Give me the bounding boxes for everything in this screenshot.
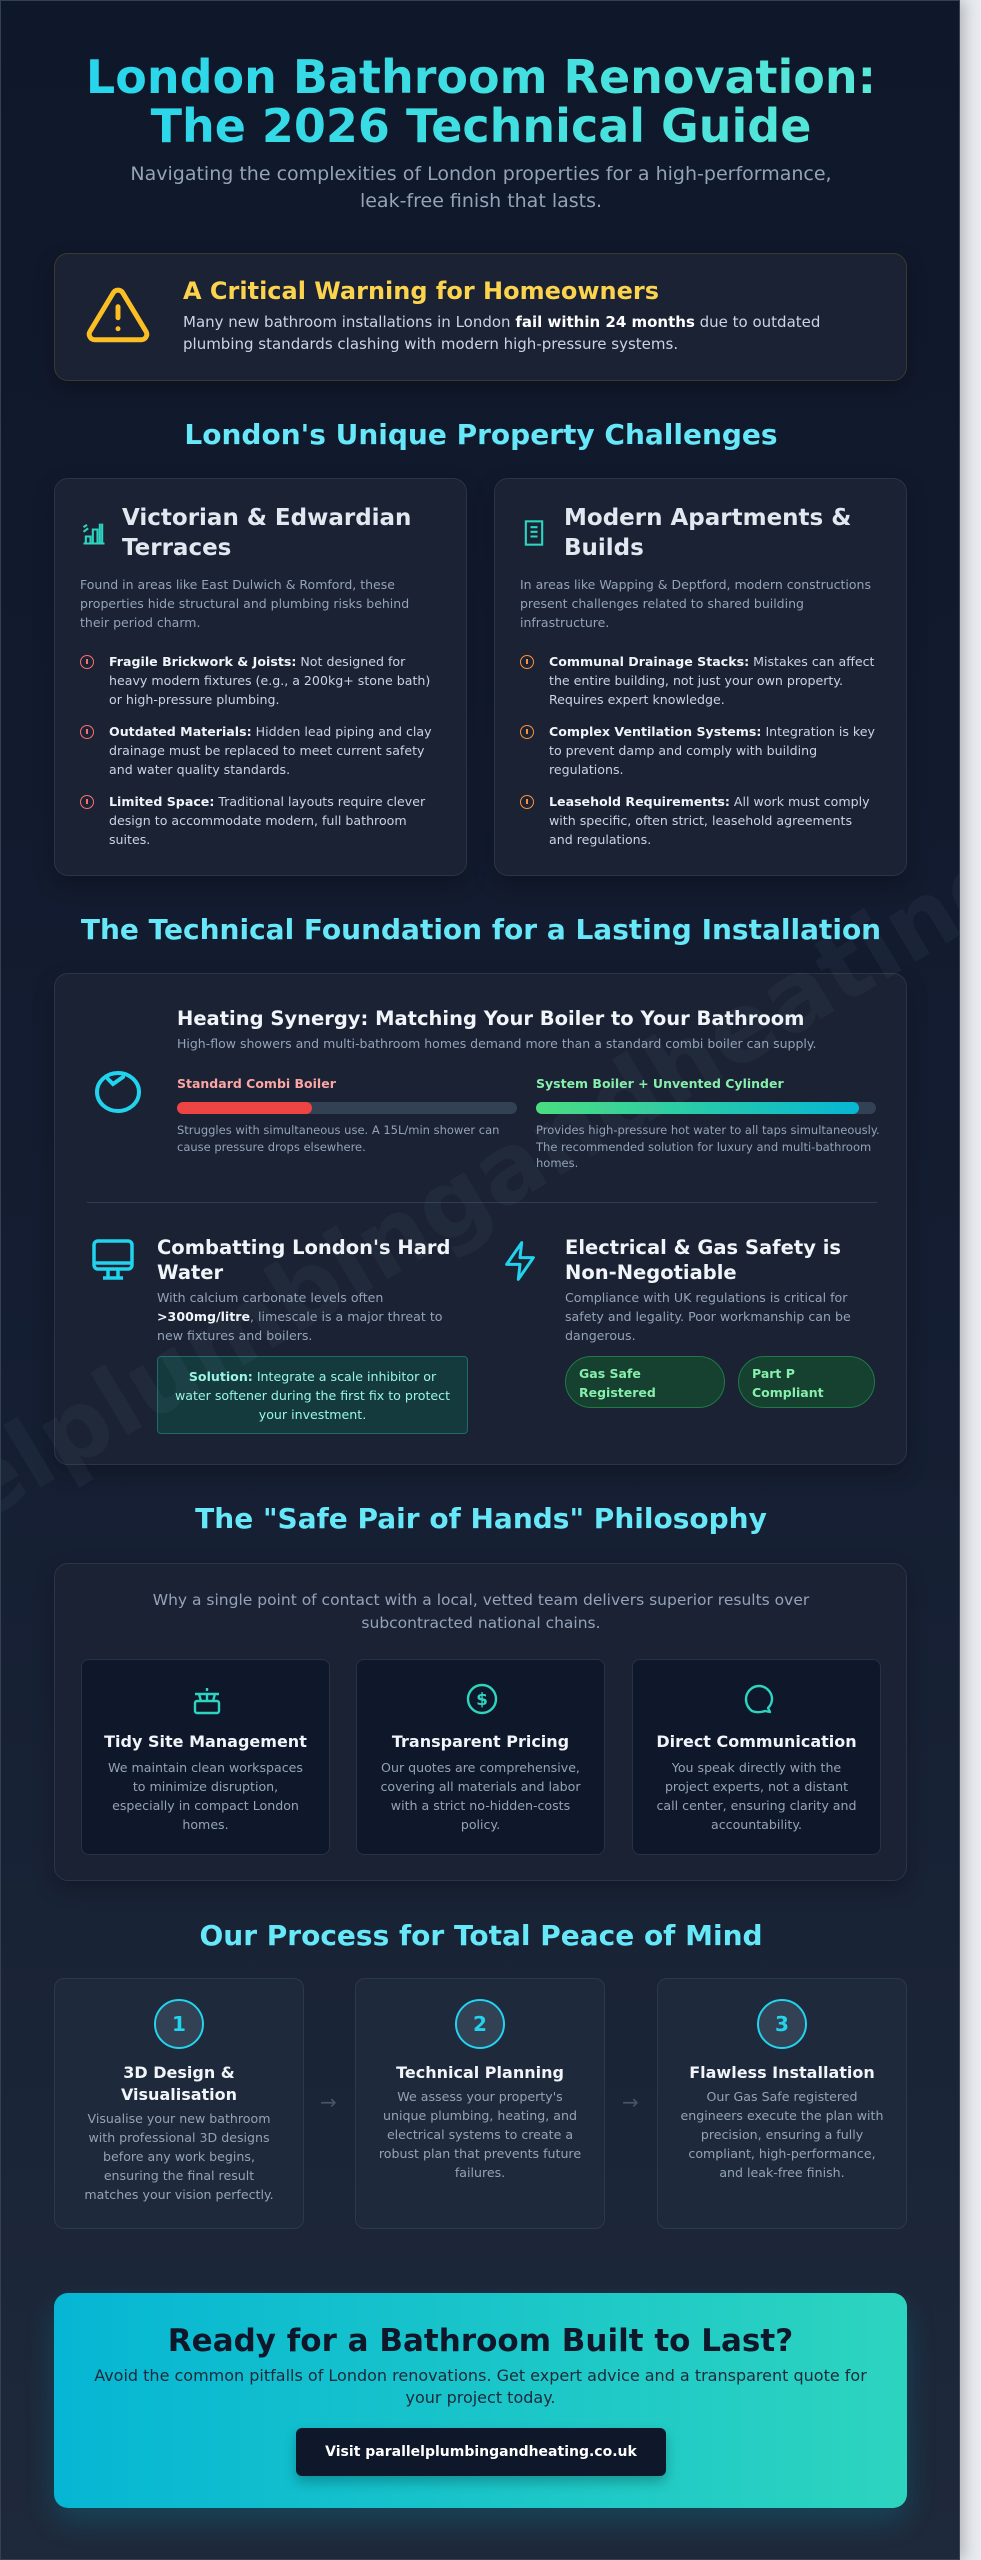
step 2: electrical systems to create a <box>387 2127 573 2142</box>
philosophy intro <box>153 1591 810 1632</box>
card: tidy site: homes. <box>182 1817 229 1832</box>
step 2: 2 <box>473 2012 487 2036</box>
subtitle: leak-free finish that lasts. <box>360 190 602 212</box>
bullets: with specific, often strict, leasehold agreements <box>549 813 852 828</box>
step 3: engineers execute the plan with <box>681 2108 883 2123</box>
step 2: unique plumbing, heating, and <box>383 2108 577 2123</box>
description: Found in areas like East Dulwich & Romford, these <box>80 577 395 592</box>
warning text: plumbing standards clashing with modern high-pressure systems. <box>183 335 678 353</box>
step 1: before any work begins, <box>103 2149 255 2164</box>
icon: monitor / hard water <box>92 1239 134 1280</box>
step 2: robust plan that prevents future <box>379 2146 581 2161</box>
bullets: Communal Drainage Stacks: Mistakes can affect <box>549 654 874 669</box>
step 2: failures. <box>455 2165 505 2180</box>
philosophy intro: subcontracted national chains. <box>361 1614 601 1632</box>
card: tidy site: We maintain clean workspaces <box>108 1760 303 1775</box>
title <box>1 53 961 151</box>
heading <box>122 505 411 561</box>
icon: terraces <box>83 524 104 544</box>
CTA text <box>94 2366 867 2407</box>
philosophy intro: Why a single point of contact with a local, vetted team delivers superior results over <box>153 1591 809 1609</box>
card: communication: project experts, not a distant <box>665 1779 848 1794</box>
subtitle <box>130 163 832 212</box>
bullets: Requires expert knowledge. <box>549 692 725 707</box>
bullets: drainage must be replaced to meet current safety <box>109 743 424 758</box>
icon: site <box>194 1688 220 1714</box>
step 1 <box>54 1978 304 2229</box>
bullets: Leasehold Requirements: All work must comply <box>549 794 870 809</box>
warning text: Many new bathroom installations in London fail within 24 months due to outdated <box>183 313 820 331</box>
step 3: precision, ensuring a fully <box>701 2127 863 2142</box>
combi boiler comparison: Struggles with simultaneous use. A 15L/min shower can <box>177 1123 499 1137</box>
safety text <box>565 1290 851 1343</box>
bullets: and water quality standards. <box>109 762 290 777</box>
title: The 2026 Technical Guide <box>151 99 811 153</box>
heading: challenges: London's Unique Property Challenges <box>184 418 778 451</box>
panel: modern apartments <box>494 478 907 876</box>
warning card <box>54 253 907 381</box>
step 1: 1 <box>172 2012 186 2036</box>
safety text: dangerous. <box>565 1328 636 1343</box>
description: properties hide structural and plumbing risks behind <box>80 596 409 611</box>
card: tidy site: Tidy Site Management <box>104 1732 307 1751</box>
heading: Terraces <box>122 535 231 561</box>
title: London Bathroom Renovation: <box>86 50 876 104</box>
badge: part p <box>738 1356 875 1408</box>
solution box: water softener during the first fix to protect <box>175 1388 450 1403</box>
step 1: matches your vision perfectly. <box>84 2187 274 2202</box>
step 1: with professional 3D designs <box>88 2130 270 2145</box>
heading: Builds <box>564 535 644 561</box>
step 1: Visualise your new bathroom <box>88 2111 270 2126</box>
hard water heading <box>157 1236 450 1284</box>
icon: dollar <box>466 1684 498 1714</box>
arrow 1: → <box>320 2090 337 2114</box>
bullets: or high-pressure plumbing. <box>109 692 280 707</box>
heading: technical foundation: The Technical Foundation for a Lasting Installation <box>81 913 881 946</box>
card: tidy site: to minimize disruption, <box>133 1779 278 1794</box>
description: their period charm. <box>80 615 200 630</box>
hard water text: new fixtures and boilers. <box>157 1328 312 1343</box>
safety heading: Non-Negotiable <box>565 1261 737 1284</box>
panel: technical foundation <box>54 973 907 1465</box>
icon: building <box>524 520 544 546</box>
card: pricing: Transparent Pricing <box>392 1732 569 1751</box>
arrow 2: → <box>622 2090 639 2114</box>
badge: gas safe <box>565 1356 725 1408</box>
bullets: suites. <box>109 832 150 847</box>
combi boiler comparison <box>177 1076 517 1154</box>
CTA text: your project today. <box>406 2388 555 2407</box>
system boiler comparison: homes. <box>536 1156 578 1170</box>
CTA button: Visit parallelplumbingandheating.co.uk <box>325 2444 637 2460</box>
card: communication: accountability. <box>711 1817 802 1832</box>
bullets: heavy modern fixtures (e.g., a 200kg+ stone bath) <box>109 673 430 688</box>
system boiler comparison: The recommended solution for luxury and multi-bathroom <box>536 1140 871 1154</box>
warning text <box>183 313 820 353</box>
safety heading <box>565 1236 841 1284</box>
card: pricing: covering all materials and labor <box>380 1779 581 1794</box>
bullets: design to accommodate modern, full bathroom <box>109 813 407 828</box>
card: communication: call center, ensuring clarity and <box>656 1798 856 1813</box>
badge: gas safe: Gas Safe <box>579 1366 641 1381</box>
combi boiler comparison: cause pressure drops elsewhere. <box>177 1140 366 1154</box>
step 3: and leak-free finish. <box>719 2165 845 2180</box>
heading <box>564 505 851 561</box>
solution box: Solution: Integrate a scale inhibitor or <box>189 1369 436 1384</box>
heading: safe pair of hands: The "Safe Pair of Hands" Philosophy <box>195 1502 767 1535</box>
card: communication: You speak directly with the <box>672 1760 841 1775</box>
CTA heading: Ready for a Bathroom Built to Last? <box>168 2323 793 2359</box>
step 3: Flawless Installation <box>689 2063 875 2082</box>
description: present challenges related to shared building <box>520 596 804 611</box>
safety text: Compliance with UK regulations is critical for <box>565 1290 847 1305</box>
badge: gas safe: Registered <box>579 1385 656 1400</box>
icon: gauge <box>95 1071 141 1113</box>
hard water heading: Water <box>157 1261 223 1284</box>
heating heading: Heating Synergy: Matching Your Boiler to Your Bathroom <box>177 1007 804 1030</box>
CTA text: Avoid the common pitfalls of London renovations. Get expert advice and a transparent quote for <box>94 2366 867 2385</box>
subtitle: Navigating the complexities of London properties for a high-performance, <box>130 163 832 185</box>
safety heading: Electrical & Gas Safety is <box>565 1236 841 1259</box>
icon: warning triangle <box>86 288 150 342</box>
card: communication: Direct Communication <box>656 1732 857 1751</box>
icon: chat <box>744 1684 774 1714</box>
bullets <box>520 654 875 847</box>
step 3: compliant, high-performance, <box>688 2146 876 2161</box>
panel: philosophy <box>54 1563 907 1881</box>
bullets <box>80 654 432 847</box>
hard water text: With calcium carbonate levels often <box>157 1290 383 1305</box>
bullets: Complex Ventilation Systems: Integration is key <box>549 724 875 739</box>
solution box: your investment. <box>259 1407 366 1422</box>
step 3 <box>657 1978 907 2229</box>
heating sub: High-flow showers and multi-bathroom homes demand more than a standard combi boiler can supply. <box>177 1036 816 1051</box>
step 3: 3 <box>775 2012 789 2036</box>
heading: Modern Apartments & <box>564 505 851 531</box>
card: tidy site: especially in compact London <box>112 1798 299 1813</box>
step 1: 3D Design & <box>123 2063 235 2082</box>
bullets: Fragile Brickwork & Joists: Not designed for <box>109 654 405 669</box>
CTA panel <box>54 2293 907 2508</box>
step 1: ensuring the final result <box>104 2168 254 2183</box>
bullets: to prevent damp and comply with building <box>549 743 817 758</box>
step 2: Technical Planning <box>396 2063 564 2082</box>
heading: process: Our Process for Total Peace of Mind <box>199 1919 763 1952</box>
description: infrastructure. <box>520 615 609 630</box>
step 2: We assess your property's <box>397 2089 563 2104</box>
bullets: Limited Space: Traditional layouts require clever <box>109 794 425 809</box>
card: tidy site <box>81 1659 330 1855</box>
step 1: Visualisation <box>121 2085 237 2104</box>
badge: part p: Compliant <box>752 1385 824 1400</box>
icon: lightning <box>505 1241 535 1281</box>
heading: Victorian & Edwardian <box>122 505 411 531</box>
CTA button <box>296 2428 666 2476</box>
system boiler comparison <box>536 1076 880 1170</box>
card: pricing <box>356 1659 605 1855</box>
card: pricing: with a strict no-hidden-costs <box>391 1798 570 1813</box>
panel: victorian <box>54 478 467 876</box>
card: pricing: policy. <box>461 1817 500 1832</box>
badge: part p: Part P <box>752 1366 795 1381</box>
system boiler comparison: System Boiler + Unvented Cylinder <box>536 1076 784 1091</box>
step 3: Our Gas Safe registered <box>706 2089 858 2104</box>
combi boiler comparison: Standard Combi Boiler <box>177 1076 336 1091</box>
bullets: Outdated Materials: Hidden lead piping and clay <box>109 724 432 739</box>
icon: dollar: $ <box>476 1690 488 1710</box>
hard water heading: Combatting London's Hard <box>157 1236 450 1259</box>
safety text: safety and legality. Poor workmanship can be <box>565 1309 851 1324</box>
description: In areas like Wapping & Deptford, modern constructions <box>520 577 871 592</box>
card: pricing: Our quotes are comprehensive, <box>381 1760 580 1775</box>
hard water text <box>157 1290 442 1343</box>
hard water text: >300mg/litre, limescale is a major threat to <box>157 1309 442 1324</box>
system boiler comparison: Provides high-pressure hot water to all taps simultaneously. <box>536 1123 880 1137</box>
bullets: and regulations. <box>549 832 651 847</box>
description <box>80 577 409 630</box>
solution box <box>157 1356 468 1434</box>
step 2 <box>355 1978 605 2229</box>
bullets: the entire building, not just your own property. <box>549 673 843 688</box>
warning heading: A Critical Warning for Homeowners <box>183 277 659 305</box>
bullets: regulations. <box>549 762 624 777</box>
description <box>520 577 871 630</box>
card: communication <box>632 1659 881 1855</box>
